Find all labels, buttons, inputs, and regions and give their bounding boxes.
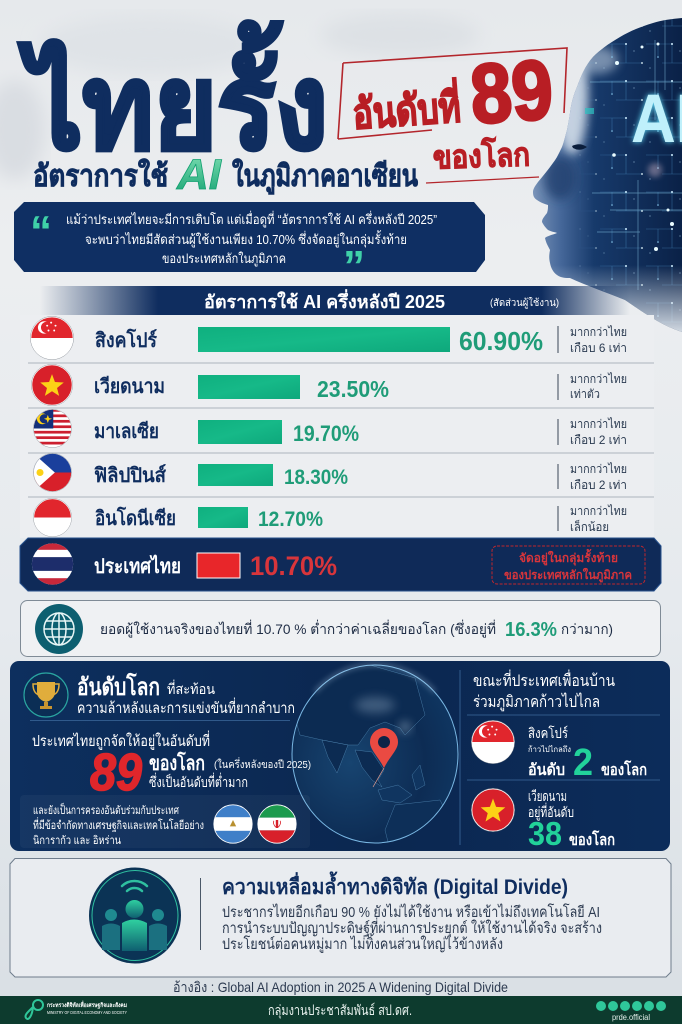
chart header: อัตราการใช้ AI ครึ่งหลังปี 2025 [204,289,445,312]
text: Thailand rank 89: ประเทศไทยถูกจัดให้อยู่ในอันดับที่ [32,730,210,750]
callout: world average: ยอดผู้ใช้งานจริงของไทยที่ 10.70 % ต่ำกว่าค่าเฉลี่ยของโลก (ซึ่งอยู่ที่ [100,620,496,638]
title: ไทยรั้ง [18,21,328,174]
text box: shared rank countries: ที่มีข้อจำกัดทางเศรษฐกิจและเทคโนโลยีอย่าง [33,817,204,832]
callout: world average: กว่ามาก) [561,621,613,637]
stamp: rank 89: 89 [467,42,556,141]
chart panel: AI usage rate [20,286,654,538]
row: Singapore: เกือบ 6 เท่า [570,341,627,355]
reference source: อ้างอิง : Global AI Adoption in 2025 A Widening Digital Divide [173,979,508,995]
row: Singapore: สิงคโปร์ [95,328,157,352]
row: Vietnam: เท่าตัว [570,387,600,401]
row: Philippines [33,453,627,492]
stamp: rank 89 [338,42,567,183]
stamp: rank 89: ของโลก [432,135,530,176]
neighbour: Singapore rank 2: อันดับ [528,761,565,779]
subtitle: อัตราการใช้ [33,158,168,193]
callout: lagging group: จัดอยู่ในกลุ่มรั้งท้าย [519,548,618,566]
logo: ministry: กระทรวงดิจิทัลเพื่อเศรษฐกิจและสังคม [47,1000,127,1009]
heading: neighbours: ร่วมภูมิภาคก้าวไปไกล [473,692,600,712]
text: digital divide body: ประโยชน์ต่อคนหมู่มาก ไม่ทิ้งคนส่วนใหญ่ไว้ข้างหลัง [222,933,503,953]
row: Vietnam: มากกว่าไทย [570,372,627,386]
logo: ministry [25,1000,127,1019]
text box: shared rank countries: นิการากัว และ อิหร่าน [33,834,121,847]
subtitle [33,151,418,199]
social icons and handle: prde.official [612,1012,650,1022]
row: Singapore: มากกว่าไทย [570,325,627,339]
row: Malaysia: มาเลเซีย [94,420,159,443]
heading: world ranking: อันดับโลก [77,672,160,701]
heading: neighbours: ขณะที่ประเทศเพื่อนบ้าน [473,669,615,690]
footer unit name: กลุ่มงานประชาสัมพันธ์ สป.ดศ. [268,1002,412,1019]
heading: world ranking: ความล้าหลังและการแข่งขันที่ยากลำบาก [77,697,295,717]
neighbour: Singapore rank 2: 2 [573,742,593,784]
neighbour: Singapore rank 2: สิงคโปร์ [528,725,568,741]
callout: lagging group: ของประเทศหลักในภูมิภาค [504,567,632,583]
social icons and handle [596,1001,666,1022]
panel: digital divide [10,858,671,977]
row: Thailand highlight: 10.70% [250,551,337,581]
row: Malaysia [33,409,627,448]
text: Thailand rank 89: ซึ่งเป็นอันดับที่ต่ำมาก [149,773,248,790]
heading: world ranking: ที่สะท้อน [167,680,215,697]
row: Thailand highlight: ประเทศไทย [94,554,181,578]
row: Vietnam [31,364,627,406]
chart header [40,286,630,315]
text: Thailand rank 89: (ในครึ่งหลังของปี 2025) [214,757,311,771]
row: Malaysia: มากกว่าไทย [570,417,627,431]
icon: globe [35,604,83,654]
callout: world average [20,600,660,656]
row: Indonesia: เล็กน้อย [570,519,609,534]
neighbour: Vietnam rank 38: ของโลก [569,829,615,849]
row: Philippines: 18.30% [284,466,348,489]
neighbour: Vietnam rank 38 [471,788,615,852]
icon: people with wifi [89,868,181,964]
row: Philippines: เกือบ 2 เท่า [570,478,627,492]
quote text: ของประเทศหลักในภูมิภาค [162,251,286,267]
stamp: rank 89: อันดับที่ [351,77,462,138]
text: digital divide body: การนำระบบปัญญาประดิษฐ์ที่ผ่านการประยุกต์ ให้ใช้งานได้จริง จะสร้าง [222,917,602,938]
callout: world average: 16.3% [505,619,557,641]
text: Thailand rank 89: ของโลก [149,751,205,775]
quote mark closing: ” [343,242,365,291]
neighbour: Singapore rank 2 [471,720,647,784]
callout: lagging group [492,546,645,584]
flag: Iran [257,804,297,844]
flag: Nicaragua [213,804,253,844]
neighbour: Vietnam rank 38: อยู่ที่อันดับ [528,803,574,821]
illustration: globe with pin [290,664,458,850]
heading: digital divide: ความเหลื่อมล้ำทางดิจิทัล (Digital Divide) [222,871,568,899]
text: Thailand rank 89 [32,730,311,802]
row: Singapore [30,316,627,360]
illustration: AI head profile [530,0,682,340]
row: Vietnam: 23.50% [317,376,389,402]
neighbour: Singapore rank 2: ก้าวไปไกลถึง [528,745,571,754]
chart header: (สัดส่วนผู้ใช้งาน) [490,297,559,309]
quote text: แม้ว่าประเทศไทยจะมีการเติบโต แต่เมื่อดูที่ “อัตราการใช้ AI ครึ่งหลังปี 2025” [66,211,437,228]
text box: shared rank countries: และยังเป็นการครองอันดับร่วมกับประเทศ [33,802,179,817]
icon: location pin [370,728,398,768]
neighbour: Vietnam rank 38: 38 [528,815,562,852]
row: Philippines: มากกว่าไทย [570,462,627,476]
row: Singapore: 60.90% [459,326,543,356]
heading: neighbours [473,669,615,712]
text: Thailand rank 89: 89 [90,744,142,802]
quote text: จะพบว่าไทยมีสัดส่วนผู้ใช้งานเพียง 10.70% ซึ่งจัดอยู่ในกลุ่มรั้งท้าย [85,230,407,248]
icon: trophy [24,673,68,717]
text box: shared rank countries [20,795,310,848]
subtitle: AI [176,151,222,199]
quote mark opening: “ [30,207,52,256]
neighbour: Vietnam rank 38: เวียดนาม [528,788,567,804]
panel: world ranking [10,661,670,852]
quote box [14,202,485,272]
row: Indonesia: 12.70% [258,508,323,531]
row: Indonesia: มากกว่าไทย [570,504,627,518]
row: Indonesia [33,498,627,537]
subtitle: ในภูมิภาคอาเซียน [232,158,418,195]
row: Malaysia: 19.70% [293,421,359,446]
logo: ministry: MINISTRY OF DIGITAL ECONOMY AND SOCIETY [47,1010,127,1015]
heading: world ranking [77,672,295,717]
row: Vietnam: เวียดนาม [94,375,165,398]
quote text [66,211,437,267]
text: digital divide body: ประชากรไทยอีกเกือบ 90 % ยังไม่ได้ใช้งาน หรือเข้าไม่ถึงเทคโนโลยี AI [222,903,600,921]
row: Indonesia: อินโดนีเซีย [95,506,176,530]
footer [0,996,682,1024]
neighbour: Singapore rank 2: ของโลก [601,759,647,779]
text: digital divide body [222,903,602,953]
row: Thailand highlight [20,538,661,591]
row: Malaysia: เกือบ 2 เท่า [570,433,627,447]
row: Philippines: ฟิลิปปินส์ [94,464,167,487]
